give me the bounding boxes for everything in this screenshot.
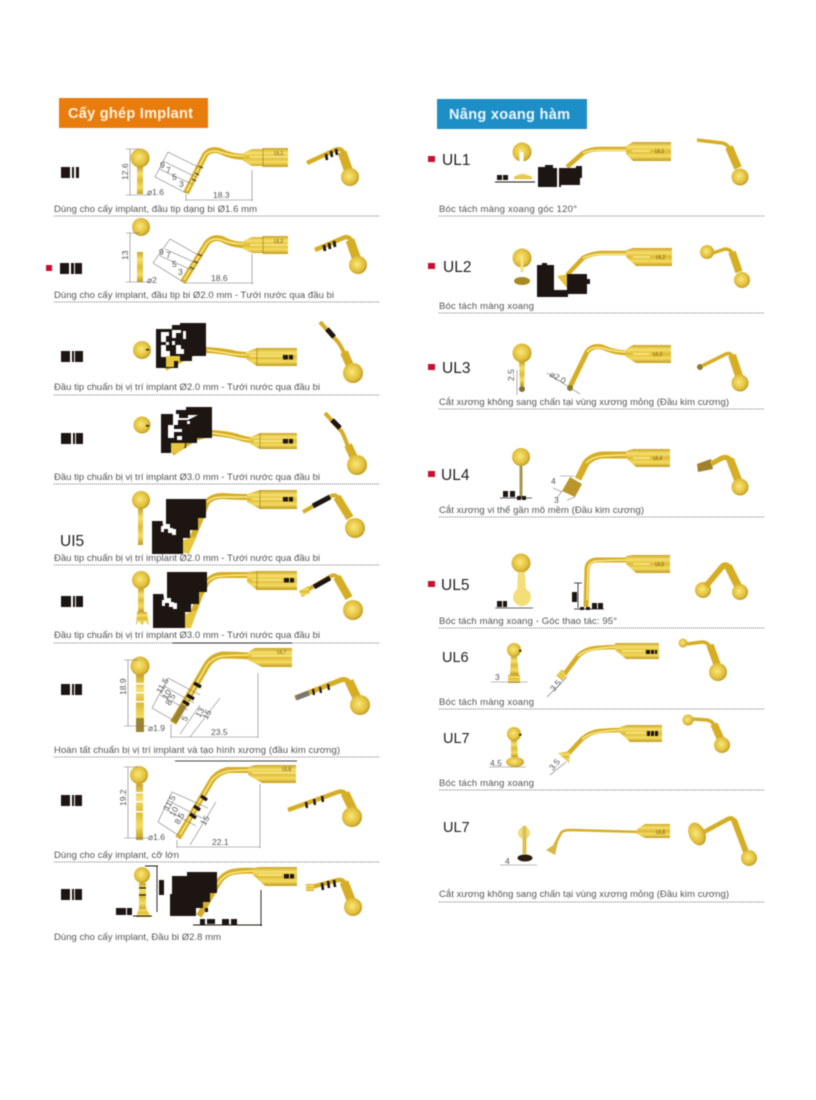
black obscured block xyxy=(161,407,212,453)
main tip xyxy=(567,142,671,167)
main tip: 3.5 xyxy=(548,678,563,693)
side view xyxy=(697,140,748,186)
caption: Bóc tách màng xoang xyxy=(439,301,534,312)
main tip xyxy=(193,867,297,926)
main tip: 23.5 xyxy=(211,727,228,737)
black obscured block xyxy=(153,572,207,628)
caption: Đầu tip chuẩn bị vị trí implant Ø2.0 mm - Tưới nước qua đầu bi xyxy=(54,553,320,564)
main tip: 7 xyxy=(166,250,171,260)
label blocks xyxy=(61,167,79,178)
main tip: 13 xyxy=(193,706,207,719)
caption: Dùng cho cấy implant, cỡ lớn xyxy=(54,850,179,861)
side view xyxy=(697,457,748,496)
caption: Dùng cho cấy implant, đầu tip bi Ø2.0 mm - Tưới nước qua đầu bi xyxy=(54,290,334,301)
front view xyxy=(489,727,526,768)
front view: 3 xyxy=(495,672,500,682)
side view xyxy=(295,680,370,715)
front view: 19.2 xyxy=(118,789,128,806)
black obscured block xyxy=(152,499,206,554)
side view xyxy=(700,245,750,288)
main tip: 18.3 xyxy=(213,190,230,200)
label blocks xyxy=(61,351,83,362)
label blocks xyxy=(61,684,82,695)
main tip: 5 xyxy=(172,172,177,182)
main tip xyxy=(546,824,670,855)
side view xyxy=(678,638,727,681)
caption: Bóc tách màng xoang - Góc thao tác: 95° xyxy=(439,616,617,627)
main tip: 15 xyxy=(198,814,212,827)
label: UL7 xyxy=(443,731,470,747)
panel: sinus row UL7 first xyxy=(439,714,730,789)
caption: Bóc tách màng xoang xyxy=(439,778,534,789)
main tip: UL3 xyxy=(653,352,662,358)
marker xyxy=(428,364,435,370)
label: UI5 xyxy=(60,533,84,550)
label: UL2 xyxy=(443,259,471,276)
panel: implant row 7 xyxy=(54,648,370,756)
main tip xyxy=(547,643,659,697)
front view: 4.5 xyxy=(490,758,502,768)
main tip: 8.5 xyxy=(163,692,178,707)
caption: Đầu tip chuẩn bị vị trí implant Ø3.0 mm - Tưới nước qua đầu bi xyxy=(54,630,320,641)
main tip: 3 xyxy=(179,179,184,189)
main tip xyxy=(155,148,288,201)
main tip: 22.1 xyxy=(212,837,229,847)
main tip: 18.6 xyxy=(211,273,228,283)
caption: Bóc tách màng xoang xyxy=(439,697,534,708)
front view: 4 xyxy=(505,856,510,866)
label: UL4 xyxy=(441,467,470,484)
front view xyxy=(495,142,535,182)
front view xyxy=(132,571,150,625)
main tip: UL1 xyxy=(655,149,664,155)
main tip: 7 xyxy=(166,165,171,175)
main tip: 15 xyxy=(200,708,214,721)
front view xyxy=(500,826,537,866)
black obscured block xyxy=(170,872,237,925)
heading: Cấy ghép Implant xyxy=(59,98,208,128)
marker xyxy=(428,156,435,162)
panel: sinus row UL5 xyxy=(428,554,748,627)
main tip: 9 xyxy=(160,160,165,170)
main tip: 3.5 xyxy=(547,757,562,772)
main tip: 8.5 xyxy=(172,811,187,826)
label: UL1 xyxy=(442,152,470,169)
label: UL6 xyxy=(442,650,469,666)
main tip xyxy=(165,348,297,368)
main tip: 11.5 xyxy=(154,676,171,695)
caption: Hoàn tất chuẩn bị vị trí implant và tạo hình xương (đầu kim cương) xyxy=(54,745,340,756)
main tip: ⌀2.0 xyxy=(548,369,568,386)
main tip xyxy=(188,571,297,627)
side view xyxy=(288,792,362,827)
panel: sinus row UL6 xyxy=(439,638,727,708)
main tip xyxy=(158,765,296,848)
marker xyxy=(428,263,435,269)
main tip: 5 xyxy=(179,714,190,723)
main tip: 11.5 xyxy=(161,793,178,812)
label: UL3 xyxy=(442,360,470,377)
front view: ⌀2 xyxy=(147,275,157,285)
panel: implant row 2 xyxy=(46,218,367,301)
caption: Dùng cho cấy implant, Đầu bi Ø2.8 mm xyxy=(54,932,221,943)
panel: sinus row UL1 xyxy=(428,140,748,215)
label blocks xyxy=(61,795,82,806)
side view xyxy=(299,575,363,620)
front view xyxy=(506,344,532,395)
front view xyxy=(120,148,164,197)
main tip: UL8 xyxy=(656,830,665,836)
main tip: UL7 xyxy=(277,650,286,656)
front view xyxy=(120,218,157,285)
label blocks xyxy=(61,596,83,607)
side view xyxy=(303,495,365,538)
panel: sinus row UL3 xyxy=(428,344,748,408)
caption: Đầu tip chuẩn bị vị trí implant Ø2.0 mm - Tưới nước qua đầu bi xyxy=(54,382,320,393)
main tip: UL5 xyxy=(655,562,664,568)
side view xyxy=(695,565,748,600)
front view xyxy=(495,554,533,608)
main tip: 3 xyxy=(178,267,183,277)
main tip xyxy=(186,490,297,553)
side view xyxy=(697,354,748,392)
black obscured block xyxy=(156,323,206,368)
black obscured block xyxy=(538,165,582,187)
main tip xyxy=(153,236,288,284)
main tip: UL1 xyxy=(274,151,283,157)
panel: implant row 8 xyxy=(54,765,362,861)
panel: sinus row UL7 second xyxy=(439,818,757,900)
marker xyxy=(46,265,52,271)
main tip: 9 xyxy=(159,247,164,257)
front view xyxy=(118,656,165,733)
marker xyxy=(428,471,435,477)
main tip xyxy=(572,555,670,610)
side view xyxy=(320,322,363,383)
panel: sinus row UL4 xyxy=(428,448,748,516)
main tip xyxy=(551,449,670,505)
front view xyxy=(512,248,532,285)
heading: Nâng xoang hàm xyxy=(437,99,587,129)
front view: 2.5 xyxy=(506,369,516,381)
main tip xyxy=(547,725,662,775)
main tip xyxy=(172,433,297,453)
panel: implant row 6 xyxy=(54,571,363,641)
front view: ⌀1.6 xyxy=(148,832,165,842)
panel: implant row 1 xyxy=(54,148,359,215)
front view: ⌀1.9 xyxy=(148,723,165,733)
panel: implant row 5 xyxy=(54,490,365,564)
main tip: UL8 xyxy=(282,767,291,773)
front view xyxy=(134,416,150,434)
side view xyxy=(682,714,730,753)
side view xyxy=(315,237,367,274)
marker xyxy=(428,581,435,587)
main tip xyxy=(547,345,671,394)
label blocks xyxy=(61,433,83,444)
main tip xyxy=(152,648,292,738)
main tip: 4 xyxy=(551,476,556,486)
front view xyxy=(133,341,151,359)
front view xyxy=(132,491,150,545)
front view xyxy=(491,643,528,683)
caption: Cắt xương không sang chấn tại vùng xương mỏng (Đầu kim cương) xyxy=(439,397,729,408)
caption: Cắt xương vi thể gần mô mềm (Đầu kim cương) xyxy=(439,505,644,516)
front view: 12.6 xyxy=(120,163,130,180)
panel: sinus row UL2 xyxy=(428,245,750,312)
caption: Bóc tách màng xoang góc 120° xyxy=(439,204,577,215)
heading: Nâng xoang hàm: Nâng xoang hàm xyxy=(449,107,570,123)
panel: implant row 9 xyxy=(54,866,362,943)
side view xyxy=(306,880,362,916)
main tip: UL2 xyxy=(274,239,283,245)
main tip: UL2 xyxy=(656,255,665,261)
main tip: 10 xyxy=(167,805,181,818)
front view: 18.9 xyxy=(118,678,128,695)
label blocks xyxy=(60,263,82,274)
black obscured block xyxy=(537,263,590,297)
panel: implant row 4 xyxy=(54,407,367,483)
main tip: 5 xyxy=(172,259,177,269)
label blocks xyxy=(61,889,82,900)
label: UL7 xyxy=(443,820,470,836)
caption: Đầu tip chuẩn bị vị trí implant Ø3.0 mm - Tưới nước qua đầu bi xyxy=(54,472,320,483)
front view xyxy=(118,766,165,842)
main tip: UL4 xyxy=(653,456,662,462)
caption: Cắt xương không sang chấn tại vùng xương mỏng (Đầu kim cương) xyxy=(439,889,729,900)
side view xyxy=(685,818,757,866)
main tip: 3 xyxy=(554,495,559,505)
front view: ⌀1.6 xyxy=(147,187,164,197)
caption: Dùng cho cấy implant, đầu tip dạng bi Ø1.6 mm xyxy=(54,204,257,215)
side view xyxy=(307,149,359,186)
main tip: 10 xyxy=(160,688,174,701)
label: UL5 xyxy=(441,577,469,594)
front view: 13 xyxy=(120,250,130,260)
front view xyxy=(116,866,164,917)
front view xyxy=(500,448,532,500)
heading: Cấy ghép Implant: Cấy ghép Implant xyxy=(68,106,193,122)
main tip xyxy=(557,248,672,288)
side view xyxy=(325,413,367,475)
panel: implant row 3 xyxy=(54,322,363,393)
